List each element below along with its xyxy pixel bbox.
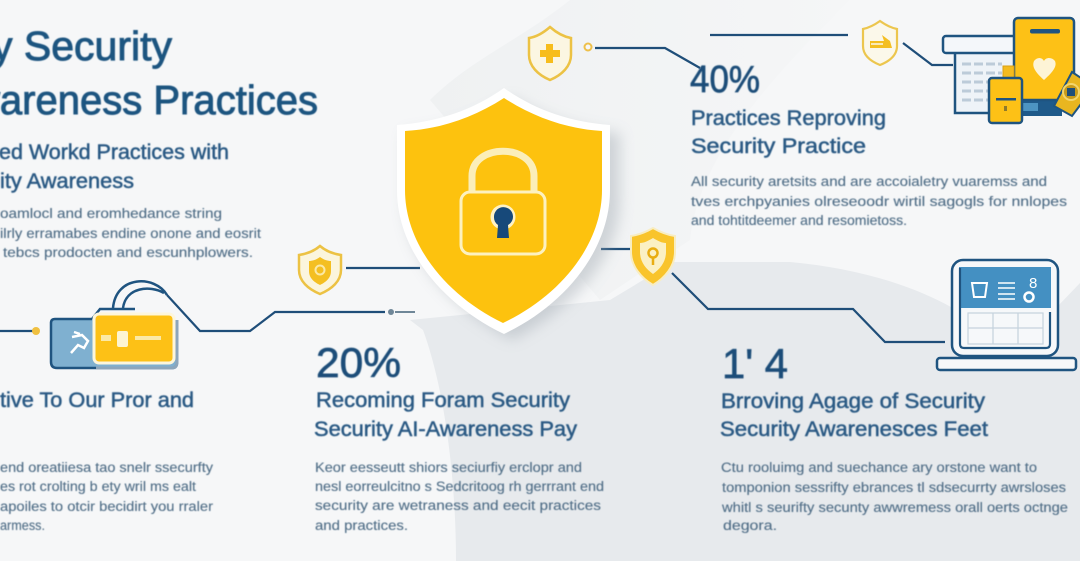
text block: 20%: 20% bbox=[316, 339, 401, 386]
text block: 1 4: 1' 4 bbox=[722, 340, 788, 387]
text block: 40%: and tohtitdeemer and resomietoss. bbox=[691, 213, 907, 228]
text block: bottom left: apoiles to otcir becidirt you rraler bbox=[0, 499, 214, 514]
icon: badge right bbox=[631, 228, 675, 285]
icon: padlock bbox=[461, 151, 545, 254]
icon: laptop: 8 bbox=[1029, 275, 1037, 292]
text block: bottom left: tive To Our Pror and bbox=[0, 389, 194, 412]
text block: 20%: nesl eorreulcitno s Sedcritoog rh gerrrant end bbox=[315, 479, 604, 494]
badge bbox=[1054, 72, 1080, 116]
text block: 20%: and practices. bbox=[315, 518, 408, 533]
text block: bottom left: end oreatiiesa tao snelr ssecurfty bbox=[0, 460, 213, 475]
text block: 40%: Security Practice bbox=[691, 135, 866, 158]
text block: bottom left bbox=[0, 389, 214, 533]
connector lines bbox=[0, 35, 953, 342]
text block: 1 4: Brroving Agage of Security bbox=[721, 390, 986, 413]
icon: devices bbox=[943, 18, 1080, 123]
text block: 20%: Recoming Foram Security bbox=[316, 389, 571, 412]
tablet bbox=[1014, 18, 1074, 100]
text block: 40%: 40% bbox=[690, 59, 760, 101]
text block: intro: tebcs prodocten and escunhplowers. bbox=[3, 245, 253, 260]
text block: 1 4: Security Awarenesces Feet bbox=[720, 418, 988, 441]
icon: shield with plus bbox=[529, 27, 571, 80]
text block: intro bbox=[0, 141, 261, 260]
text block: 1 4: whitl s seurifty secunty awwremess orall oerts octnge bbox=[721, 500, 1068, 515]
phone bbox=[989, 66, 1022, 123]
title bbox=[0, 23, 318, 123]
text block: bottom left: es rot crolting b ety wril ms ealt bbox=[0, 479, 196, 494]
text block: intro: ed Workd Practices with bbox=[0, 141, 229, 164]
text block: 1 4: tomponion sessrifty ebrances tl sdsecurrty awrsloses bbox=[722, 480, 1066, 495]
text block: 20%: Keor eesseutt shiors seciurfiy erclopr and bbox=[315, 460, 582, 475]
text block: 20% bbox=[314, 339, 604, 533]
text block: bottom left: armess. bbox=[0, 518, 45, 533]
icon: locked card bbox=[51, 281, 177, 368]
text block: 40%: tves erchpyanies olreseoodr wirtil sagogls for nnlopes bbox=[691, 194, 1067, 209]
text block: 1 4 bbox=[720, 340, 1068, 533]
text block: 1 4: degora. bbox=[723, 518, 777, 533]
text block: 40%: Practices Reproving bbox=[691, 107, 886, 130]
text block: 20%: Security AI-Awareness Pay bbox=[314, 418, 578, 441]
central shield with padlock bbox=[397, 88, 620, 340]
text block: intro: oamlocl and eromhedance string bbox=[0, 206, 222, 221]
text block: 20%: security are wetraness and eecit practices bbox=[315, 498, 601, 513]
icon: shield top right bbox=[863, 21, 897, 65]
browser window bbox=[943, 36, 1020, 113]
icon: small shield left bbox=[299, 246, 341, 294]
text block: intro: ity Awareness bbox=[0, 170, 134, 193]
text block: 1 4: Ctu rooluimg and suechance ary orstone want to bbox=[721, 460, 1037, 475]
text block: 40% bbox=[690, 59, 1067, 228]
text block: intro: ilrly erramabes endine onone and eosrit bbox=[0, 226, 261, 241]
text block: 40%: All security aretsits and are accoialetry vuaremss and bbox=[691, 174, 1047, 189]
icon: laptop bbox=[937, 260, 1076, 370]
